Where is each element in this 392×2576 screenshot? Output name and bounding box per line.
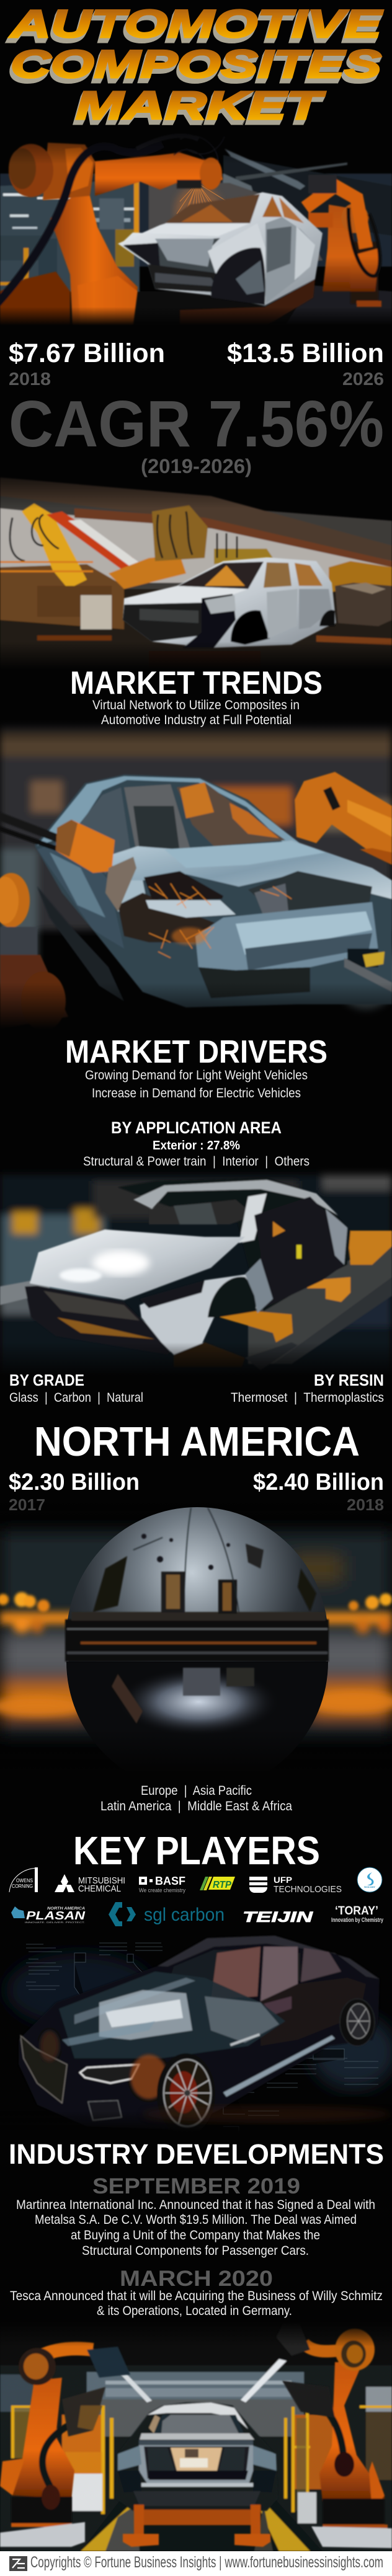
logo: ufp technologies: UFP [274,1875,292,1885]
logo: solvay: SOLVAY [364,1885,375,1888]
rear opening [139,2445,253,2486]
logo: plasan: PLASAN [26,1910,86,1922]
xray [59,1972,285,2058]
logo: ufp technologies: TECHNOLOGIES [274,1884,342,1895]
logo: solvay [357,1867,382,1892]
segment: by resin [231,1371,384,1405]
sparks [149,883,292,958]
logo: sgl carbon [109,1902,225,1926]
heading: market drivers [65,1034,327,1100]
segment: by application area: Structural & Power train | Interior | Others [83,1154,310,1169]
logo: owens corning: CORNING [12,1883,33,1889]
stats: market size: $13.5 Billion [227,339,384,368]
rear wheel [340,1999,375,2046]
development: march 2020: MARCH 2020 [120,2267,273,2291]
stats: market size: 2018 [9,370,51,389]
segment: by application area [83,1118,310,1169]
logo: rtp: RTP [213,1880,231,1890]
heading: market trends: Virtual Network to Utilize Composites in [92,698,300,712]
stats: market size: $7.67 Billion [9,339,165,368]
orange supports [347,1231,392,1265]
logo: toray [331,1905,383,1924]
hood [30,1229,245,1300]
stats: market size: 2026 [342,370,384,389]
development: march 2020: & its Operations, Located in Germany. [97,2304,292,2318]
illustration: x-ray car [0,1936,392,2136]
sparks [176,185,226,215]
icon: fortune business insights logo [9,2556,27,2571]
front wheel [157,2053,215,2135]
stats: market size [9,339,384,389]
title: AUTOMOTIVE [9,2,383,46]
heading: market drivers: Growing Demand for Light Weight Vehicles [85,1068,308,1082]
left robot [0,2347,130,2547]
logo: rtp [200,1877,235,1890]
title: MARKET [76,83,326,128]
heading: market drivers: MARKET DRIVERS [65,1034,327,1070]
segment: by grade: Glass | Carbon | Natural [9,1391,143,1405]
logos: key players [9,1867,383,1926]
title [9,2,383,128]
logo: owens corning: OWENS [16,1878,33,1883]
heading: market trends: Automotive Industry at Full Potential [101,713,292,727]
logo: plasan [11,1906,86,1924]
glow [130,2055,167,2099]
robot right [295,772,392,859]
development: september 2019: Metalsa S.A. De C.V. Worth $19.5 Million. The Deal was Aimed [35,2213,357,2227]
grille [25,1286,177,1355]
segment: by application area: Exterior : 27.8% [153,1139,240,1153]
illustration: metallic sphere [0,1507,392,1742]
title: COMPOSITES [11,43,381,86]
logo: basf: BASF [155,1875,185,1887]
segment: by resin: BY RESIN [314,1371,384,1389]
other regions list: Latin America | Middle East & Africa [100,1799,292,1813]
illustration: blue steel car with sparks [0,719,392,1031]
heading: market drivers: Increase in Demand for Electric Vehicles [92,1086,301,1100]
logo: owens corning [9,1867,38,1892]
logo: plasan: INNOVATE. DELIVER. PROTECT. [25,1921,85,1924]
grille [20,2035,67,2103]
development: september 2019 [16,2174,375,2258]
heading: north america: NORTH AMERICA [34,1419,360,1465]
other regions list [100,1784,292,1813]
logo: plasan: NORTH AMERICA [47,1907,85,1911]
heading: north america [9,1419,384,1514]
logo: teijin: TEIJIN [243,1909,313,1926]
logo: basf: We create chemistry [139,1887,185,1893]
right robot [276,2319,392,2548]
heading: north america: 2017 [9,1495,45,1514]
heading: north america: $2.40 Billion [253,1469,384,1495]
logo: toray: ‘TORAY’ [335,1905,378,1918]
car side + cabin [35,774,392,1007]
stand [134,2505,144,2539]
heading: market trends [70,665,323,727]
development: september 2019: at Buying a Unit of the Company that Makes the [71,2228,320,2242]
CAGR figure: (2019-2026) [141,455,252,477]
robot arm [0,136,225,329]
heading: market trends: MARKET TRENDS [70,665,323,701]
footer bar [0,2551,392,2576]
heading: key players: KEY PLAYERS [73,1828,320,1873]
headlight [80,2065,139,2083]
other regions list: Europe | Asia Pacific [141,1784,252,1798]
cages [11,2406,392,2514]
logo: mitsubishi chemical [55,1874,125,1894]
logo: basf [139,1875,185,1893]
development: september 2019: Structural Components for Passenger Cars. [82,2244,309,2258]
segment: by grade [9,1371,143,1405]
logo: mitsubishi chemical: CHEMICAL [78,1883,121,1894]
logo: mitsubishi chemical: MITSUBISHI [78,1875,125,1886]
logo: ufp technologies [249,1875,342,1895]
left robot [0,873,30,927]
roof + cabin [118,1178,350,1311]
segment: by application area: BY APPLICATION AREA [111,1118,282,1137]
floor [88,2501,322,2551]
heading: north america: 2018 [347,1495,384,1514]
heading: north america: $2.30 Billion [9,1469,140,1495]
illustration: rear view car between robots [0,2319,392,2551]
development: september 2019: SEPTEMBER 2019 [92,2174,300,2198]
fender [140,1274,257,1355]
right robot [305,175,381,307]
arm effector [0,815,62,840]
car body [118,192,323,325]
illustration: car in yellow robot line [0,465,392,670]
illustration: robot arm welding car body [0,121,392,329]
car [115,2402,278,2547]
illustration: silver car on assembly line [0,1166,392,1376]
heading: industry developments: INDUSTRY DEVELOPMENTS [9,2138,384,2170]
logo: sgl carbon: sgl carbon [144,1905,225,1925]
segment: by grade: BY GRADE [9,1371,84,1389]
development: march 2020 [10,2267,383,2318]
